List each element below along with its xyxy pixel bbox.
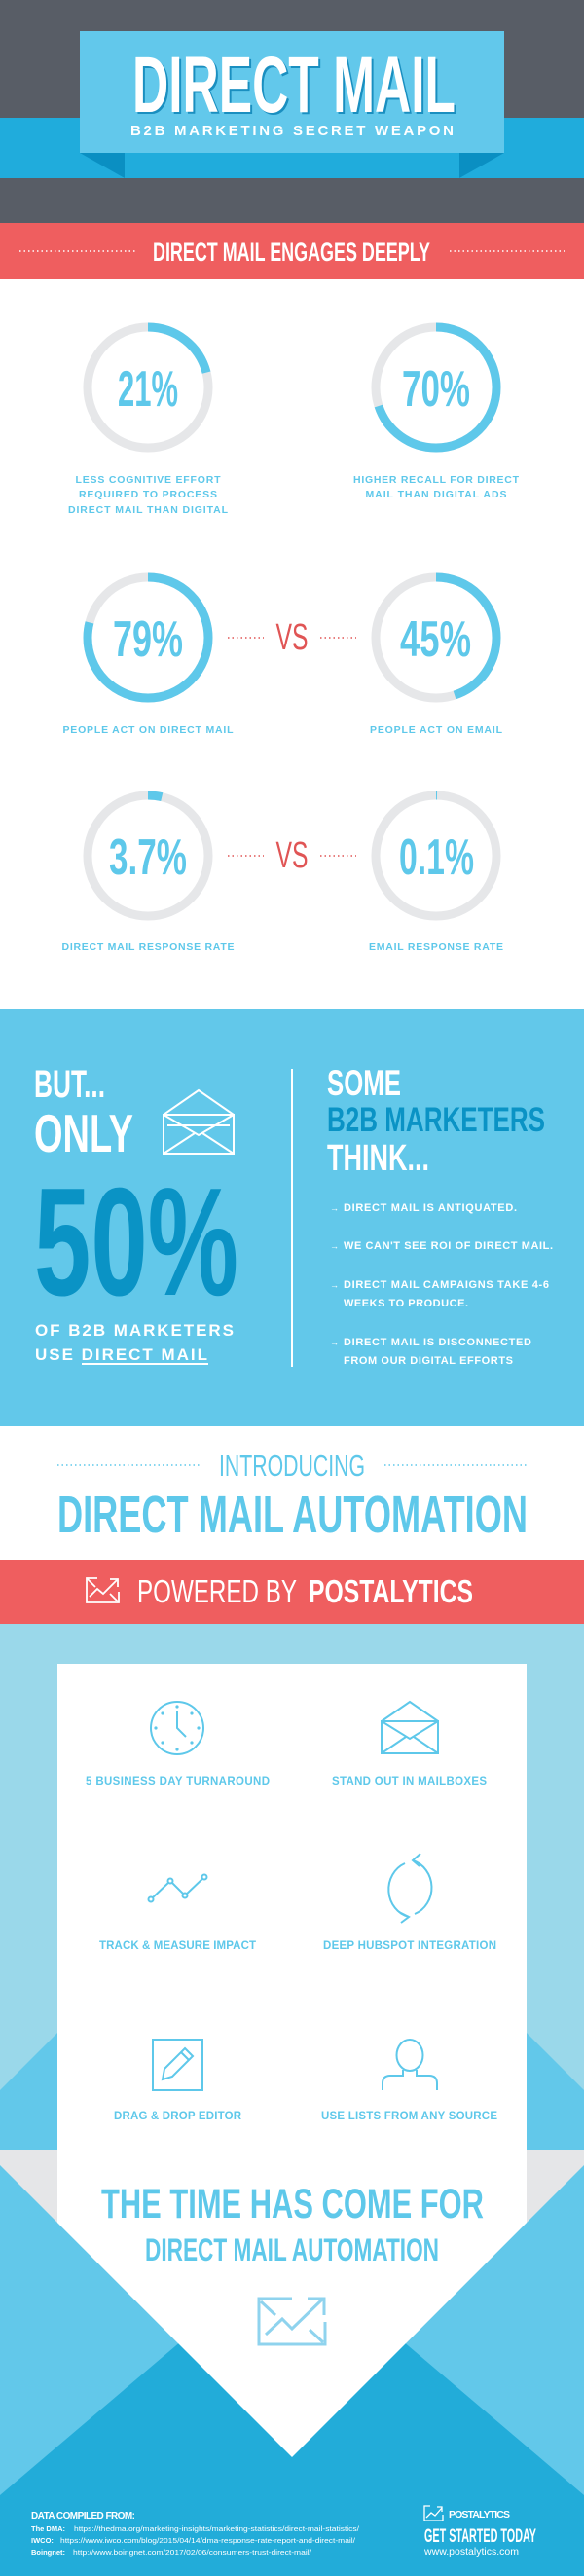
header background — [0, 0, 584, 223]
heading: but only: BUT... — [34, 1063, 105, 1106]
list: marketer beliefs — [330, 1202, 553, 1367]
footer: sources — [31, 2511, 360, 2557]
stat: 79%: 79% — [113, 611, 183, 668]
stat: 3.7% — [62, 795, 234, 953]
stat: 45% — [370, 577, 503, 736]
panel: features card — [57, 1664, 527, 2457]
heading: but only: ONLY — [34, 1103, 133, 1163]
heading: introducing direct mail automation — [57, 1449, 528, 1544]
section banner: engages deeply: DIRECT MAIL ENGAGES DEEPLY — [153, 238, 430, 267]
header ribbon — [0, 31, 584, 178]
stat: 0.1% — [369, 795, 503, 953]
stat: 70%: MAIL THAN DIGITAL ADS — [366, 489, 506, 500]
vs connector row 2 — [228, 617, 356, 658]
heading: some b2b marketers think: SOME — [327, 1063, 401, 1103]
label: drag & drop editor: DRAG & DROP EDITOR — [114, 2111, 242, 2122]
footer: call to action: POSTALYTICS — [449, 2509, 510, 2521]
icon: edit — [153, 2040, 202, 2090]
icon: open envelope — [164, 1090, 234, 1154]
text: of b2b marketers use direct mail: OF B2B MARKETERS — [35, 1321, 234, 1340]
label: stand out in mailboxes: STAND OUT IN MAILBOXES — [332, 1776, 487, 1787]
banner: powered by postalytics: POWERED BY — [137, 1573, 297, 1609]
vs connector row 2: VS — [276, 617, 308, 658]
icon: user — [383, 2040, 437, 2090]
list: marketer beliefs: DIRECT MAIL IS ANTIQUATED. — [344, 1202, 517, 1214]
list: marketer beliefs: WE CAN'T SEE ROI OF DIRECT MAIL. — [344, 1240, 553, 1252]
icon: clock — [151, 1702, 203, 1754]
stat: 0.1%: EMAIL RESPONSE RATE — [369, 941, 503, 953]
list: marketer beliefs: → — [330, 1338, 339, 1347]
heading: some b2b marketers think: THINK... — [327, 1138, 429, 1179]
list: marketer beliefs: WEEKS TO PRODUCE. — [344, 1298, 468, 1309]
heading: introducing direct mail automation: INTRODUCING — [219, 1449, 365, 1483]
list: marketer beliefs: → — [330, 1280, 339, 1290]
stat: 45%: 45% — [400, 611, 471, 668]
stat: 21%: 21% — [118, 361, 178, 418]
stat: 3.7%: DIRECT MAIL RESPONSE RATE — [62, 941, 234, 953]
stat: 79%: PEOPLE ACT ON DIRECT MAIL — [62, 724, 234, 736]
footer: call to action: www.postalytics.com — [423, 2546, 519, 2558]
icon: logo small — [424, 2506, 443, 2521]
stat: 21%: LESS COGNITIVE EFFORT — [76, 474, 221, 486]
list: marketer beliefs: → — [330, 1241, 339, 1251]
stat: 70% — [353, 327, 520, 500]
big number 50%: 50% — [34, 1157, 238, 1328]
label: 5 business day turnaround: 5 BUSINESS DAY TURNAROUND — [86, 1776, 270, 1787]
heading: the time has come: DIRECT MAIL AUTOMATION — [145, 2232, 439, 2267]
label: deep hubspot integration: DEEP HUBSPOT INTEGRATION — [323, 1940, 496, 1952]
stat: 3.7%: 3.7% — [109, 829, 187, 886]
heading: but only — [34, 1063, 133, 1163]
footer: sources: https://www.iwco.com/blog/2015/04/14/dma-response-rate-report-and-direct-mail/ — [60, 2536, 356, 2545]
stat: 70%: HIGHER RECALL FOR DIRECT — [353, 474, 520, 486]
footer: sources: Boingnet: — [31, 2548, 65, 2557]
label: use lists from any source: USE LISTS FROM ANY SOURCE — [321, 2111, 497, 2122]
label: track & measure impact: TRACK & MEASURE IMPACT — [99, 1940, 256, 1952]
vs connector row 3 — [228, 835, 356, 876]
panel: only 50% use direct mail — [0, 1009, 584, 1426]
stat: 21%: REQUIRED TO PROCESS — [79, 489, 217, 500]
footer: sources: https://thedma.org/marketing-insights/marketing-statistics/direct-mail-statistics/ — [74, 2524, 360, 2533]
footer: sources: IWCO: — [31, 2536, 54, 2545]
list: marketer beliefs: FROM OUR DIGITAL EFFORTS — [344, 1355, 513, 1367]
list: marketer beliefs: DIRECT MAIL IS DISCONNECTED — [344, 1337, 531, 1348]
icon: envelope — [382, 1702, 438, 1753]
vs connector row 3: VS — [276, 835, 308, 876]
section banner: engages deeply — [0, 223, 584, 279]
banner: powered by postalytics — [0, 1560, 584, 1624]
stat: 0.1%: 0.1% — [399, 829, 474, 886]
list: marketer beliefs: → — [330, 1203, 339, 1213]
footer: sources: The DMA: — [31, 2524, 65, 2533]
stat: 70%: 70% — [402, 361, 470, 418]
stat: 21% — [68, 327, 229, 516]
heading: the time has come — [101, 2181, 484, 2267]
text: of b2b marketers use direct mail — [35, 1321, 234, 1365]
stat: 21%: DIRECT MAIL THAN DIGITAL — [68, 504, 229, 516]
footer: call to action — [423, 2506, 536, 2558]
stat: 45%: PEOPLE ACT ON EMAIL — [370, 724, 503, 736]
icon: postalytics logo — [87, 1578, 119, 1602]
envelope background — [0, 1624, 584, 2576]
icon: line chart — [148, 1875, 206, 1902]
list: marketer beliefs: DIRECT MAIL CAMPAIGNS TAKE 4-6 — [344, 1279, 549, 1291]
icon: envelope with chart — [259, 2299, 325, 2344]
footer: sources: DATA COMPILED FROM: — [31, 2511, 135, 2521]
icon: sync arrows — [388, 1854, 431, 1923]
subtitle: B2B MARKETING SECRET WEAPON — [130, 123, 454, 139]
footer: sources: http://www.boingnet.com/2017/02/06/consumers-trust-direct-mail/ — [73, 2548, 312, 2557]
heading: some b2b marketers think — [327, 1063, 545, 1179]
text: of b2b marketers use direct mail: USE DIRECT MAIL — [35, 1345, 207, 1364]
stat: 79% — [62, 577, 234, 736]
banner: powered by postalytics: POSTALYTICS — [309, 1573, 473, 1609]
